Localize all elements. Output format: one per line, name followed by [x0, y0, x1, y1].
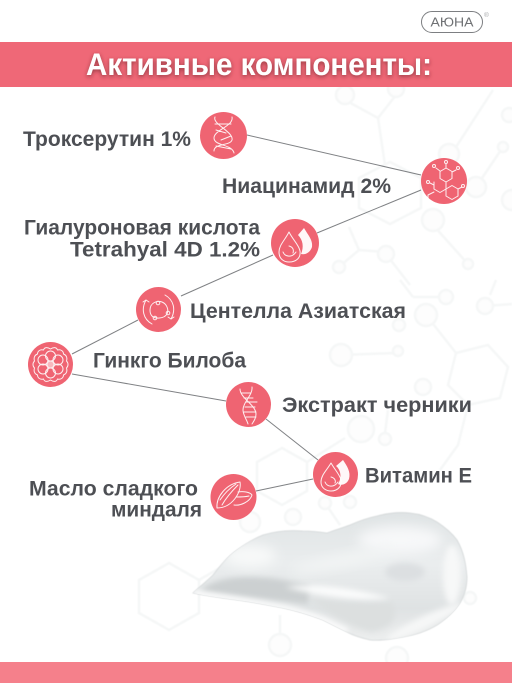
- item: Ниацинамид: [222, 158, 467, 204]
- item: Центелла Азиатская: Центелла Азиатская: [190, 300, 406, 323]
- item: Экстракт черники: Экстракт черники: [282, 394, 472, 417]
- item: Масло сладкого миндаля: миндаля: [111, 498, 202, 522]
- item: Гиалуроновая кислота: Гиалуроновая кислота: [24, 216, 260, 240]
- item: Гинкго Билоба: Гинкго Билоба: [93, 350, 246, 372]
- item: Гиалуроновая кислота: [24, 216, 319, 267]
- item: Экстракт черники: [226, 382, 472, 427]
- footer band: [0, 662, 512, 683]
- gel smear: [193, 513, 467, 645]
- item: Масло сладкого миндаля: [29, 474, 256, 522]
- logo: АЮНА: [422, 11, 489, 32]
- item: Масло сладкого миндаля: Масло сладкого: [29, 478, 198, 500]
- header band: [0, 42, 512, 87]
- item: Ниацинамид: Ниацинамид 2%: [222, 175, 391, 198]
- item: Витамин Е: Витамин Е: [365, 464, 472, 488]
- item: Троксерутин: Троксерутин 1%: [23, 128, 191, 151]
- item: Витамин Е: [313, 452, 472, 497]
- title: Активные компоненты:: [86, 46, 432, 82]
- logo: АЮНА: АЮНА: [430, 16, 474, 30]
- item: Гиалуроновая кислота: Tetrahyal 4D 1.2%: [70, 238, 260, 262]
- item: Центелла Азиатская: [136, 287, 406, 332]
- logo: АЮНА: ®: [484, 11, 489, 19]
- item: Гинкго Билоба: [28, 342, 246, 387]
- item: Троксерутин: [23, 112, 247, 159]
- connector lines: [72, 135, 421, 491]
- background molecules: [139, 81, 512, 669]
